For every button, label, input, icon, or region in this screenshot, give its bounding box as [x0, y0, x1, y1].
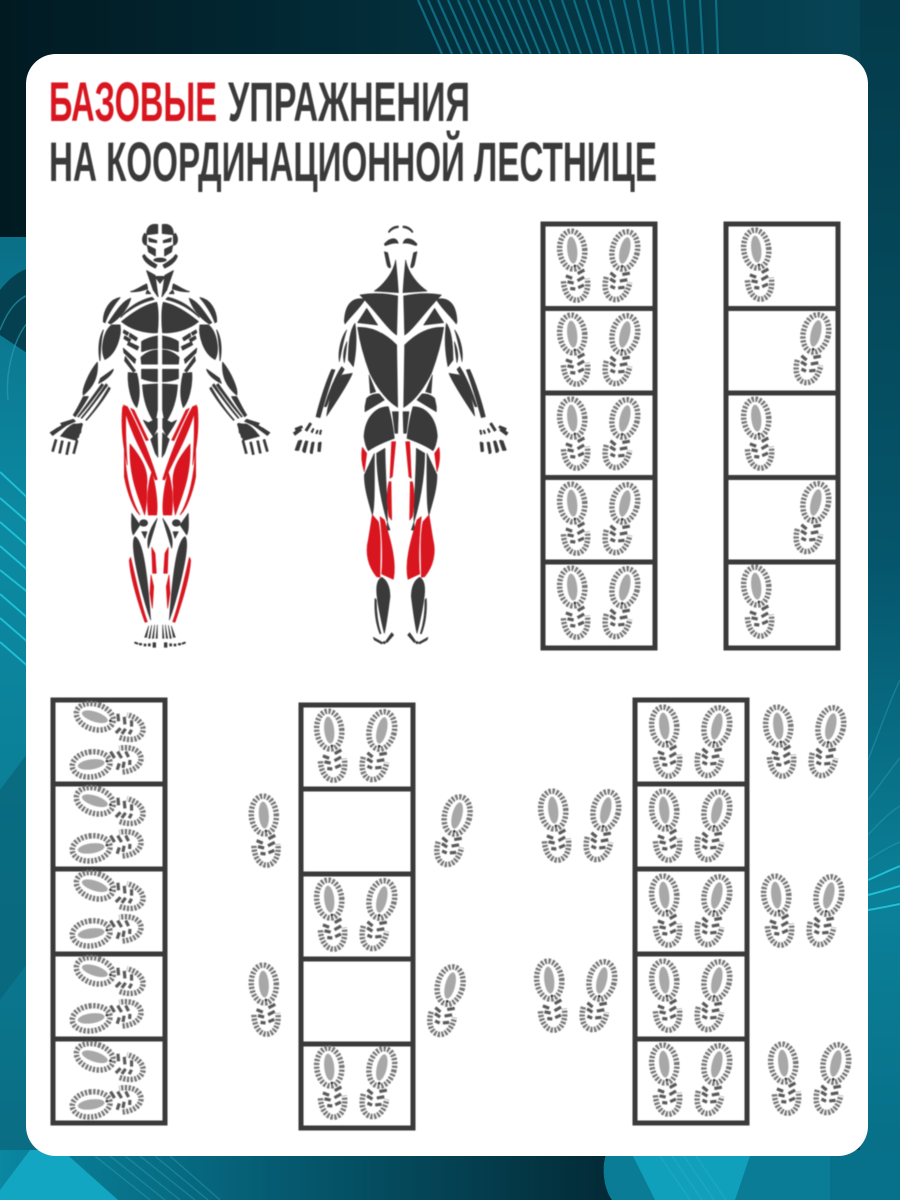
ladder 1: both feet in every cell [543, 224, 655, 648]
ladder 4: in-in-out pattern [250, 705, 474, 1128]
title: БАЗОВЫЕ [49, 70, 217, 133]
muscle figure: back view [293, 226, 508, 644]
footprints outside ladder 4 [250, 794, 474, 1037]
muscle figure: front view [50, 224, 270, 647]
title: УПРАЖНЕНИЯ [228, 70, 470, 133]
title [49, 70, 657, 193]
footprints outside ladder 5 [535, 705, 852, 1115]
ladder 2: alternating single foot [726, 224, 838, 648]
ladder 5: side straddle pattern [535, 700, 852, 1123]
ladder 3: feet sideways in every cell [53, 699, 165, 1123]
